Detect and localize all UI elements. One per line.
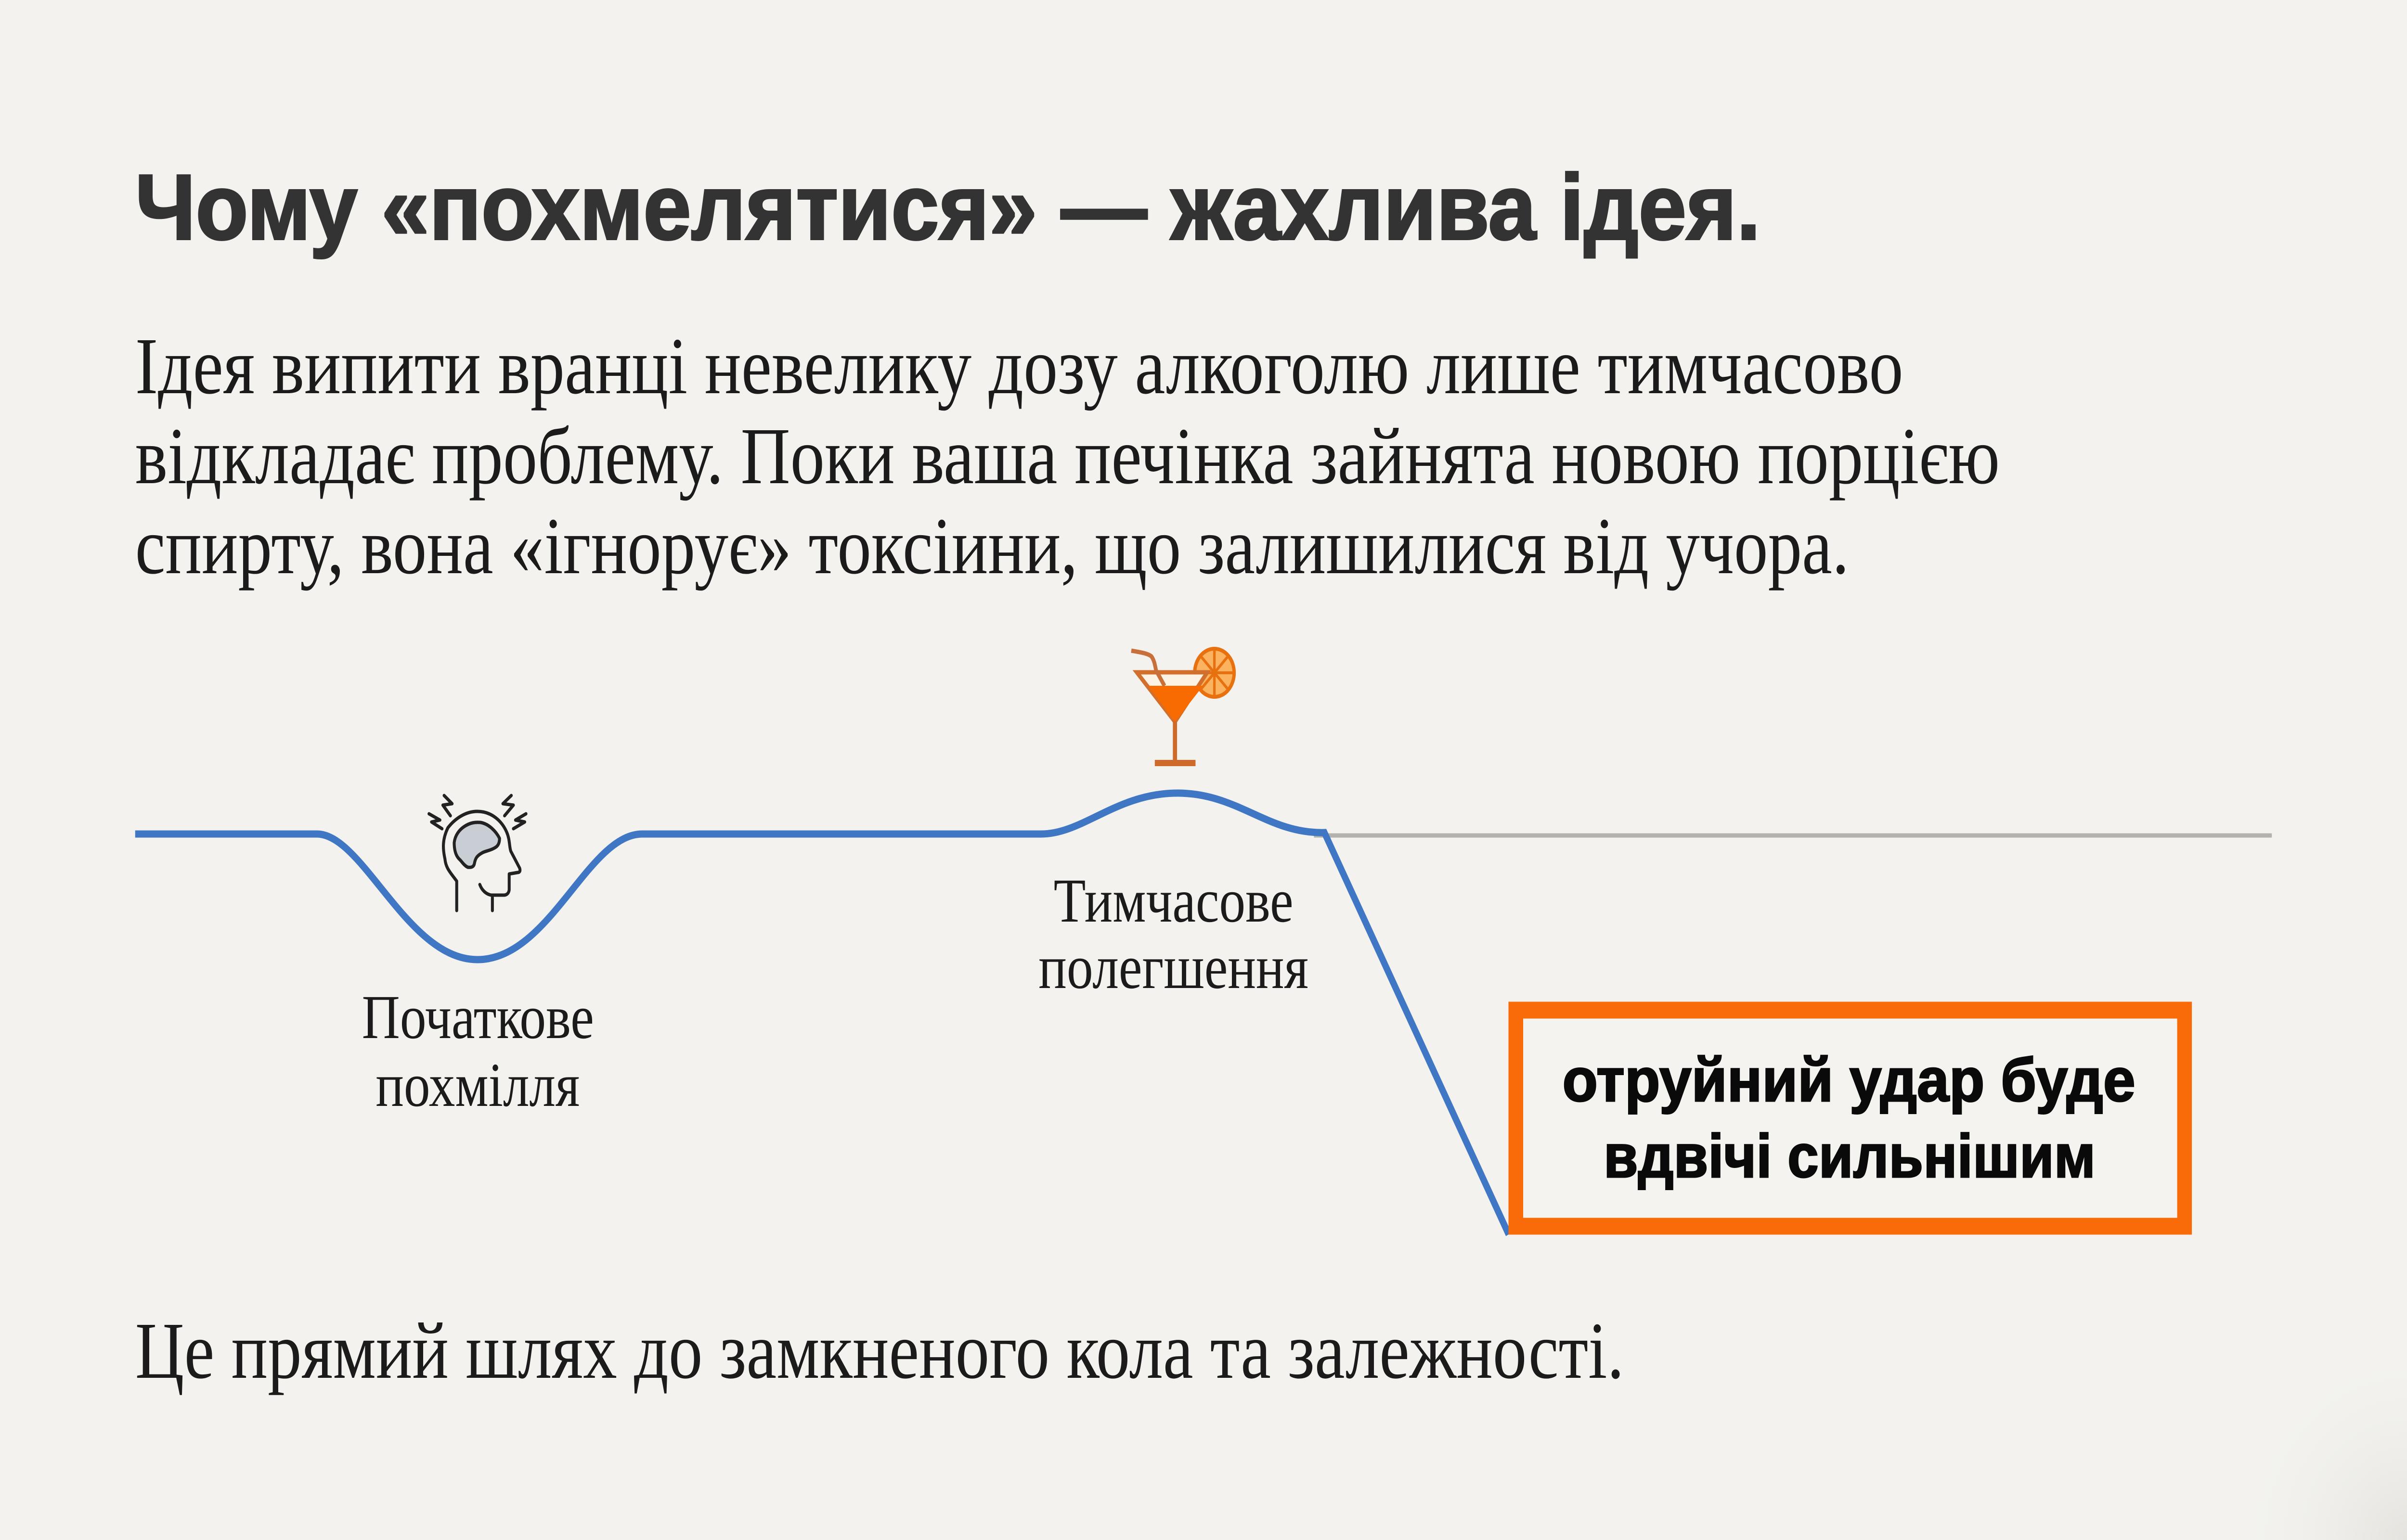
liquid <box>1148 686 1203 722</box>
straw <box>1131 651 1165 686</box>
label: initial hangover: похмілля <box>375 1051 580 1120</box>
label: temporary relief: полегшення <box>1038 933 1308 1002</box>
baseline <box>1314 834 2272 837</box>
title: Чому «похмелятися» — жахлива ідея. <box>135 155 1760 259</box>
text block: intro paragraph: відкладає проблему. Поки ваша печінка зайнята новою порцією <box>135 412 2000 501</box>
callout: вдвічі сильнішим <box>1604 1122 2096 1191</box>
text block: intro paragraph: спирту, вона «ігнорує» токсіини, що залишилися від учора. <box>135 502 1849 591</box>
icon: cocktail <box>1131 649 1234 766</box>
label: initial hangover: Початкове <box>362 983 594 1052</box>
orange slice <box>1195 649 1234 697</box>
label: temporary relief: Тимчасове <box>1054 866 1294 936</box>
label: temporary relief <box>1038 866 1308 1002</box>
callout: отруйний удар буде <box>1563 1046 2135 1115</box>
chart: hangover curve <box>135 793 2272 1234</box>
text block: intro paragraph: Ідея випити вранці невелику дозу алкоголю лише тимчасово <box>135 322 1903 411</box>
stem and base <box>1173 721 1178 761</box>
glass <box>1137 672 1207 722</box>
text block: conclusion: Це прямий шлях до замкненого кола та залежності. <box>135 1307 1624 1396</box>
label: initial hangover <box>362 983 594 1120</box>
icon: head with headache <box>429 796 526 911</box>
callout <box>1516 1010 2185 1226</box>
text block: intro paragraph <box>135 322 2000 591</box>
blue curve <box>135 793 1509 1234</box>
